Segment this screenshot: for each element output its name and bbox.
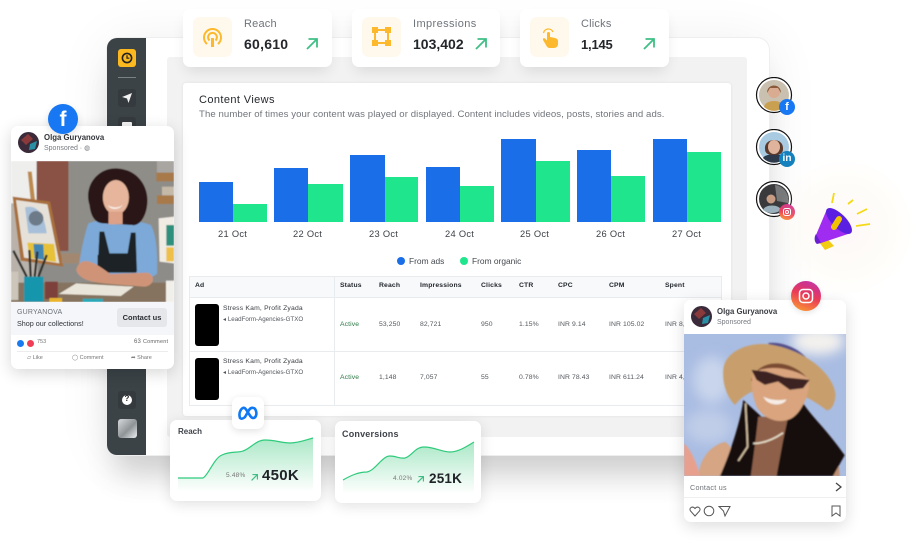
row 2: ◂ LeadForm-Agencies-GTXO <box>223 369 303 376</box>
table header: Clicks <box>481 282 502 289</box>
badge: linkedin <box>779 151 795 167</box>
reach icon <box>193 17 232 57</box>
row 1: INR 8, <box>665 321 685 328</box>
icon: meta <box>232 397 264 429</box>
reach value: 60,610 <box>244 36 288 52</box>
contact button: Contact us <box>123 313 161 322</box>
row 2: INR 611.24 <box>609 374 644 381</box>
like count: 753 <box>37 339 46 345</box>
avatar <box>18 132 39 153</box>
badge: instagram <box>779 204 795 220</box>
row 1: Stress Kam, Profit Zyada <box>223 305 303 312</box>
badge: linkedin: in <box>783 153 791 164</box>
glow behind megaphone <box>775 160 915 295</box>
clicks label: Clicks <box>581 18 612 30</box>
name: Olga Guryanova <box>717 307 777 316</box>
dashboard frame <box>107 38 769 455</box>
table header: CTR <box>519 282 533 289</box>
date label: 24 Oct <box>445 229 474 239</box>
ads table <box>189 276 722 406</box>
table header: Impressions <box>420 282 462 289</box>
arrow up <box>475 38 487 50</box>
reactions <box>17 338 168 361</box>
heart badge <box>27 340 34 347</box>
reach area chart <box>178 437 314 486</box>
row 2: INR 78.43 <box>558 374 590 381</box>
table header: Status <box>340 282 362 289</box>
row 1: INR 9.14 <box>558 321 586 328</box>
conversions area chart <box>342 442 474 489</box>
table header: Ad <box>195 282 204 289</box>
date label: 23 Oct <box>369 229 398 239</box>
arrow up <box>251 474 258 481</box>
arrow up <box>306 38 318 50</box>
conversions value: 251K <box>429 471 462 486</box>
reach mini card <box>170 420 321 501</box>
stat card: reach <box>183 9 332 67</box>
name: Olga Guryanova <box>44 133 104 142</box>
bar chart <box>199 139 721 222</box>
row 2: 55 <box>481 374 489 381</box>
arrow up <box>417 476 424 483</box>
avatar <box>691 306 712 327</box>
row 1: 53,250 <box>379 321 400 328</box>
date label: 25 Oct <box>520 229 549 239</box>
date label: 26 Oct <box>596 229 625 239</box>
instagram ad card <box>684 300 846 522</box>
logo icon <box>118 49 136 67</box>
sidebar <box>107 38 146 455</box>
icon: megaphone <box>814 192 870 250</box>
photo: woman in hat <box>684 334 846 476</box>
like action: ▱ Like <box>27 355 43 361</box>
comment action: ◯ Comment <box>72 355 104 361</box>
row 1: INR 105.02 <box>609 321 644 328</box>
date label: 27 Oct <box>672 229 701 239</box>
date label: 22 Oct <box>293 229 322 239</box>
row 1: 1.15% <box>519 321 539 328</box>
nav icon: send <box>118 89 136 107</box>
subtitle: The number of times your content was played or displayed. Content includes videos, posts, stories and ads. <box>199 109 664 120</box>
avatar: facebook profile <box>756 77 795 115</box>
contact button <box>117 308 167 327</box>
avatar: linkedin profile <box>756 129 795 167</box>
arrow up <box>643 38 655 50</box>
legend: From organic <box>472 256 521 266</box>
row 1: Active <box>340 321 359 328</box>
clicks icon <box>530 17 569 57</box>
row 2: INR 4, <box>665 374 685 381</box>
caption: Shop our collections! <box>17 319 84 328</box>
icon: instagram <box>791 281 821 311</box>
row 1: 82,721 <box>420 321 441 328</box>
row 2: 1,148 <box>379 374 397 381</box>
sponsored: Sponsored · ◍ <box>44 145 90 152</box>
row 2: 0.78% <box>519 374 539 381</box>
icon: facebook: f <box>60 108 66 131</box>
reach percent: 5.48% <box>226 472 245 479</box>
row 2: 7,057 <box>420 374 438 381</box>
icon: facebook <box>48 104 78 134</box>
impressions label: Impressions <box>413 18 477 30</box>
stat card: clicks <box>520 9 669 67</box>
inner grey panel <box>167 57 747 437</box>
reach value: 450K <box>262 467 299 484</box>
photo: painter <box>11 161 174 302</box>
impressions value: 103,402 <box>413 36 464 52</box>
conversions title: Conversions <box>342 429 399 439</box>
facebook ad card <box>11 126 174 369</box>
reach label: Reach <box>244 18 277 30</box>
nav icon: calendar <box>118 117 136 135</box>
conversions percent: 4.02% <box>393 475 412 482</box>
heading: content views: Content Views <box>199 94 275 106</box>
badge: facebook: f <box>785 101 789 113</box>
like badge <box>17 340 24 347</box>
row 2: Active <box>340 374 359 381</box>
impressions icon <box>362 17 401 57</box>
help icon: ? <box>125 394 129 403</box>
table header: CPM <box>609 282 625 289</box>
panel: content views <box>183 83 731 416</box>
badge: facebook <box>779 99 795 115</box>
legend: From ads <box>409 256 444 266</box>
contact row: Contact us <box>690 483 727 492</box>
comment count: 63 Comment <box>134 339 168 345</box>
reach title: Reach <box>178 427 202 436</box>
chevron <box>836 482 842 492</box>
table header: Spent <box>665 282 685 289</box>
conversions mini card <box>335 421 481 503</box>
date label: 21 Oct <box>218 229 247 239</box>
cta strip <box>11 302 174 335</box>
avatar: instagram profile <box>756 181 795 220</box>
row 1: 950 <box>481 321 493 328</box>
clicks value: 1,145 <box>581 37 613 52</box>
row 2: Stress Kam, Profit Zyada <box>223 358 303 365</box>
help icon <box>118 391 136 409</box>
table header: Reach <box>379 282 400 289</box>
table header: CPC <box>558 282 573 289</box>
legend <box>397 256 522 266</box>
brand: GURYANOVA <box>17 309 62 316</box>
sponsored: Sponsored <box>717 319 751 326</box>
share action: ➦ Share <box>131 355 152 361</box>
stat card: impressions <box>352 9 500 67</box>
profile thumbnail <box>118 419 137 438</box>
row 1: ◂ LeadForm-Agencies-GTXO <box>223 316 303 323</box>
action icons <box>689 506 840 517</box>
